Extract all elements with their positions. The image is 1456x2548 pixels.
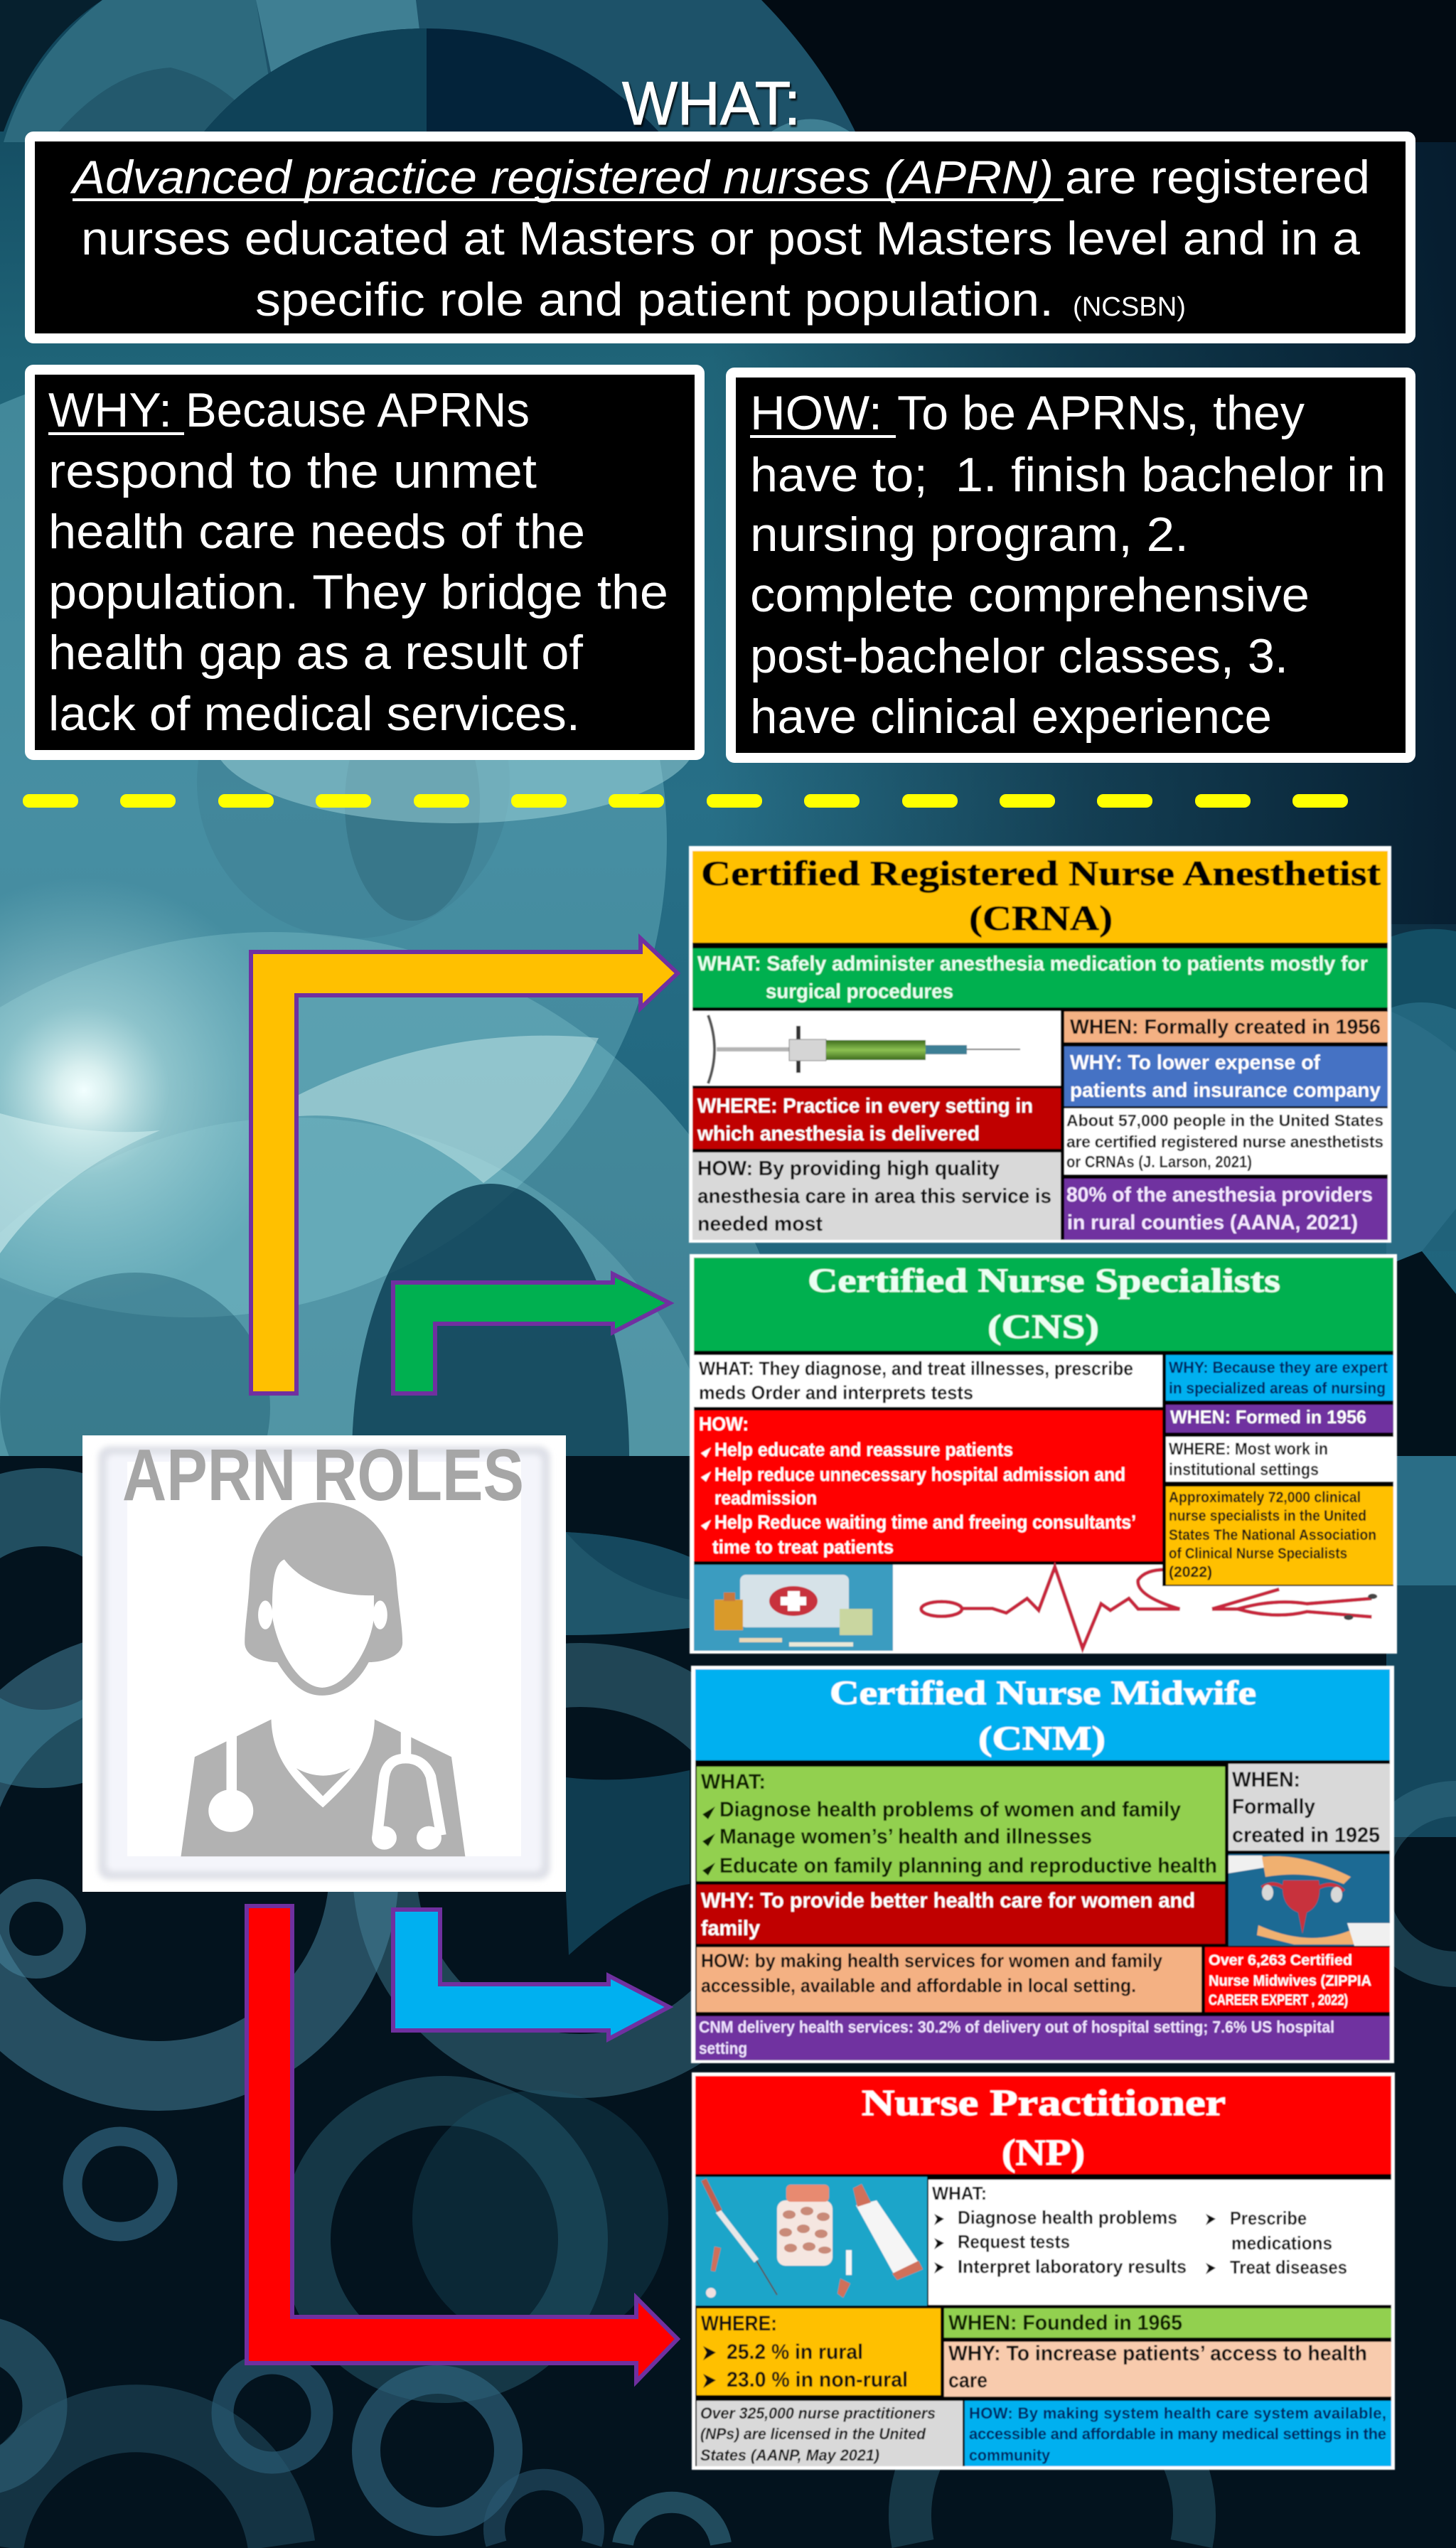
text: CNS what: meds Order and interprets tests <box>699 1382 973 1403</box>
text: NP how: HOW: By making system health care system available, <box>969 2404 1386 2422</box>
panel: NP <box>692 2072 1395 2470</box>
icon: nurse figure <box>181 1502 465 1856</box>
text: NP where: WHERE: <box>701 2312 777 2335</box>
text: NP why: WHY: To increase patients’ access to health <box>948 2342 1367 2365</box>
text: CRNA how: HOW: By providing high quality <box>697 1157 1000 1180</box>
panel: why: health gap as a result of <box>48 626 583 680</box>
panel: why: health care needs of the <box>48 505 585 559</box>
text: NP count: (NPs) are licensed in the United <box>700 2425 926 2443</box>
text: NP count: States (AANP, May 2021) <box>700 2446 879 2464</box>
panel: how: have to; 1. finish bachelor in <box>750 448 1386 502</box>
text: CNM how: accessible, available and affordable in local setting. <box>701 1975 1136 1996</box>
text: CNM delivery share <box>699 2018 1334 2057</box>
divider: yellow dashes <box>23 794 1348 808</box>
panel: what definition: Advanced practice registered nurses (APRN) <box>70 151 1054 203</box>
text: CNM when: created in 1925 <box>1232 1824 1380 1847</box>
text: CRNA how: anesthesia care in area this service is <box>697 1185 1051 1208</box>
text: NP why <box>948 2342 1367 2392</box>
text: NP what: Treat diseases <box>1230 2257 1347 2278</box>
text: CNS where: WHERE: Most work in <box>1169 1440 1328 1459</box>
text: CRNA count <box>1066 1111 1383 1171</box>
title: CNS: Certified Nurse Specialists <box>808 1262 1280 1300</box>
text: NP what <box>932 2183 1347 2278</box>
text: CRNA how: needed most <box>697 1213 823 1236</box>
text: NP what: Prescribe <box>1230 2207 1307 2229</box>
text: NP count: Over 325,000 nurse practitioners <box>700 2404 936 2422</box>
text: CNM what <box>701 1770 1217 1878</box>
heading: APRN ROLES: APRN ROLES <box>122 1434 524 1516</box>
text: CRNA count: About 57,000 people in the United States <box>1066 1111 1383 1130</box>
panel: why: WHY: <box>48 383 172 437</box>
text: CRNA why: patients and insurance company <box>1070 1079 1381 1102</box>
title: CNM: Certified Nurse Midwife <box>830 1674 1256 1712</box>
icon: medicine kit <box>694 1565 893 1651</box>
panel: why: lack of medical services. <box>48 687 580 741</box>
text: CNM when: Formally <box>1232 1795 1315 1819</box>
panel: how: post-bachelor classes, 3. <box>750 629 1288 683</box>
text: CRNA rural share <box>1066 1184 1373 1234</box>
title: CRNA <box>701 853 1381 938</box>
panel: why: population. They bridge the <box>48 565 668 619</box>
text: CNS how: readmission <box>714 1487 817 1509</box>
text: CNM when <box>1232 1768 1380 1847</box>
text: CRNA where: WHERE: Practice in every setting in <box>697 1095 1033 1118</box>
text: CNM count: CAREER EXPERT , 2022) <box>1209 1992 1348 2008</box>
text: CNS how: Help educate and reassure patients <box>714 1439 1013 1460</box>
text: CRNA rural share: 80% of the anesthesia providers <box>1066 1184 1373 1206</box>
text: CNS why: in specialized areas of nursing <box>1169 1379 1386 1397</box>
text: CRNA count: are certified registered nurse anesthetists <box>1066 1133 1383 1151</box>
text: CNS where: institutional settings <box>1169 1460 1319 1479</box>
text: NP what: medications <box>1231 2232 1332 2254</box>
text: CNS where <box>1169 1440 1328 1479</box>
text: CRNA why <box>1070 1051 1381 1102</box>
text: CNS how: Help Reduce waiting time and freeing consultants’ <box>714 1511 1136 1533</box>
background: teal bokeh upper section <box>0 0 1456 1456</box>
panel: how <box>731 373 1410 758</box>
panel: how: have clinical experience <box>750 690 1272 744</box>
icon: hands and uterus <box>1228 1854 1390 1946</box>
text: CNM count: Over 6,263 Certified <box>1209 1952 1352 1969</box>
text: CNM count: Nurse Midwives (ZIPPIA <box>1209 1973 1371 1989</box>
text: CNM what: Manage women’s’ health and illnesses <box>719 1825 1092 1848</box>
text: CNM how <box>701 1950 1162 1996</box>
text: NP why: care <box>948 2369 987 2392</box>
text: CRNA count: or CRNAs (J. Larson, 2021) <box>1066 1152 1252 1171</box>
icon: syringe, pill jar and tube <box>695 2177 927 2306</box>
title: NP: Nurse Practitioner <box>862 2083 1226 2124</box>
text: CNS count: of Clinical Nurse Specialists <box>1169 1546 1347 1562</box>
panel: why <box>30 370 700 755</box>
text: NP what: Request tests <box>958 2231 1070 2252</box>
icon card: APRN roles nurse portrait <box>82 1434 566 1892</box>
text: CRNA when: WHEN: Formally created in 1956 <box>1070 1016 1381 1039</box>
text: CRNA what: surgical procedures <box>766 980 953 1003</box>
arrow: blue to CNM <box>393 1910 669 2039</box>
text: CNS when: WHEN: Formed in 1956 <box>1170 1406 1366 1428</box>
panel: how: complete comprehensive <box>750 568 1310 622</box>
text: CNS how: time to treat patients <box>712 1536 894 1558</box>
title: CRNA: (CRNA) <box>969 898 1113 938</box>
arrow: green to CNS <box>393 1274 670 1393</box>
text: CNM how: HOW: by making health services for women and family <box>701 1950 1162 1971</box>
text: NP what: Diagnose health problems <box>958 2207 1177 2228</box>
text: CNS what <box>699 1358 1133 1403</box>
text: NP count <box>700 2404 936 2464</box>
text: CNM why: family <box>701 1917 760 1940</box>
panel: CNM <box>691 1666 1394 2063</box>
text: CNM delivery share: setting <box>699 2039 747 2057</box>
panel: why: respond to the unmet <box>48 444 537 498</box>
panel: CRNA <box>689 846 1391 1243</box>
text: CNS count: nurse specialists in the United <box>1169 1508 1366 1524</box>
icon: ECG stethoscope <box>921 1567 1377 1649</box>
text: CRNA how <box>697 1157 1051 1236</box>
text: CNM what: Diagnose health problems of women and family <box>719 1798 1181 1821</box>
arrow: orange to CRNA <box>251 938 678 1393</box>
text: CNM delivery share: CNM delivery health services: 30.2% of delivery out of hospital setting; 7.6% US hospital <box>699 2018 1334 2036</box>
text: CNM why <box>701 1889 1195 1940</box>
text: CNM why: WHY: To provide better health care for women and <box>701 1889 1195 1912</box>
heading: WHAT: WHAT: <box>622 70 801 138</box>
text: CNS why: WHY: Because they are expert <box>1169 1359 1388 1376</box>
title: NP: (NP) <box>1002 2133 1085 2173</box>
text: NP what: WHAT: <box>932 2183 987 2204</box>
text: CNS count: (2022) <box>1169 1564 1212 1580</box>
text: CNS how: Help reduce unnecessary hospital admission and <box>714 1464 1125 1485</box>
title: CNS: (CNS) <box>987 1308 1099 1346</box>
panel: how: HOW: <box>750 386 882 440</box>
background: dark rings lower section <box>0 1456 1456 2548</box>
text: CRNA where <box>697 1095 1033 1145</box>
text: NP when: WHEN: Founded in 1965 <box>948 2311 1182 2335</box>
panel: what definition: nurses educated at Masters or post Masters level and in a <box>81 212 1360 264</box>
panel: what definition <box>30 136 1410 338</box>
text: CNS how: HOW: <box>699 1413 749 1435</box>
title: CNM: (CNM) <box>978 1720 1106 1757</box>
panel: how: To be APRNs, they <box>897 386 1305 440</box>
text: CRNA rural share: in rural counties (AANA, 2021) <box>1067 1211 1358 1234</box>
text: CNS why <box>1169 1359 1388 1397</box>
icon: syringe <box>708 1015 1020 1083</box>
text: CRNA what <box>697 953 1368 1003</box>
text: NP where: 23.0 % in non-rural <box>727 2368 908 2392</box>
title: CRNA: Certified Registered Nurse Anesthetist <box>701 853 1381 893</box>
panel: what definition: specific role and patient population. <box>255 273 1054 326</box>
text: CNS count: States The National Association <box>1169 1527 1376 1543</box>
text: CNM what: WHAT: <box>701 1770 766 1794</box>
text: NP how: community <box>969 2446 1051 2464</box>
text: CRNA where: which anesthesia is delivered <box>697 1123 980 1145</box>
text: CNM count <box>1209 1952 1371 2008</box>
text: NP where: 25.2 % in rural <box>727 2340 863 2364</box>
text: CNM when: WHEN: <box>1232 1768 1300 1792</box>
panel: how: nursing program, 2. <box>750 508 1189 562</box>
text: CNS how <box>699 1413 1136 1558</box>
title: CNM <box>830 1674 1256 1757</box>
text: CRNA why: WHY: To lower expense of <box>1070 1051 1320 1074</box>
text: CNS what: WHAT: They diagnose, and treat illnesses, prescribe <box>699 1358 1133 1379</box>
text: CRNA what: WHAT: Safely administer anesthesia medication to patients mostly for <box>697 953 1368 975</box>
arrow: red to NP <box>247 1906 678 2382</box>
text: NP what: Interpret laboratory results <box>958 2256 1187 2277</box>
text: NP how <box>969 2404 1386 2464</box>
panel: why: Because APRNs <box>186 383 530 437</box>
panel: what definition: are registered <box>1065 151 1370 203</box>
panel: what definition: (NCSBN) <box>1073 292 1186 322</box>
text: CNM what: Educate on family planning and reproductive health <box>719 1854 1217 1878</box>
panel: CNS <box>690 1254 1397 1654</box>
text: CNS count <box>1169 1489 1376 1580</box>
title: CNS <box>808 1262 1280 1346</box>
text: CNS count: Approximately 72,000 clinical <box>1169 1489 1361 1506</box>
title: NP <box>862 2083 1226 2173</box>
text: NP where <box>701 2312 908 2392</box>
text: NP how: accessible and affordable in many medical settings in the <box>969 2425 1386 2443</box>
